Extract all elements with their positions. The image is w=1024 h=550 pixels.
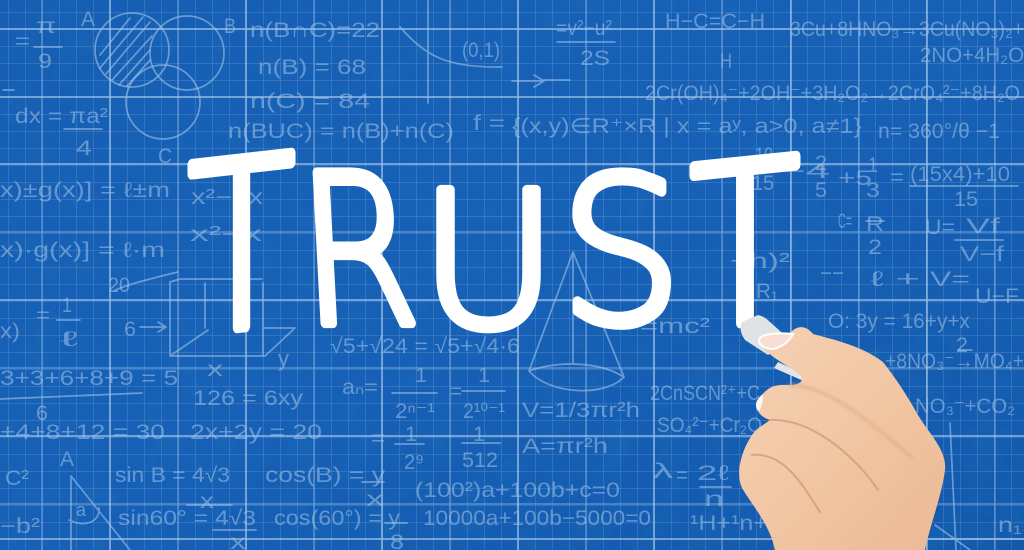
handwritten formulas left: 6	[36, 402, 48, 425]
handwritten formulas centre: =	[450, 380, 462, 403]
diagram: right triangle	[69, 476, 130, 550]
handwritten formulas left: x)	[0, 320, 20, 343]
handwritten formulas centre: 1	[478, 364, 490, 387]
handwritten formulas left: B	[224, 15, 236, 38]
handwritten formulas left: dx = πa²	[15, 105, 108, 128]
handwritten formulas right: V=	[930, 268, 970, 291]
handwritten formulas right: R	[866, 213, 884, 236]
handwritten formulas left: =	[36, 304, 50, 327]
handwritten formulas centre: =	[676, 464, 688, 487]
handwritten formulas left: +4+8+12 = 30	[0, 421, 165, 444]
hand holding chalk	[739, 327, 945, 550]
handwritten formulas centre: =	[371, 427, 385, 450]
handwritten formulas right: 15	[954, 188, 978, 211]
handwritten formulas right: H	[720, 50, 732, 73]
handwritten formulas centre: V=1/3πr²h	[522, 399, 640, 422]
handwritten formulas right: R₁	[756, 280, 778, 303]
handwritten formulas left: A	[60, 448, 74, 471]
handwritten formulas left: sin60° = 4√3	[118, 507, 256, 530]
graph: exponential curve	[400, 0, 502, 103]
diagram: cuboid	[115, 272, 295, 371]
handwritten formulas centre: (100²)a+100b+c=0	[415, 479, 620, 502]
handwritten formulas left: cos(60°) = y	[274, 507, 401, 530]
handwritten formulas left: n(C) = 84	[250, 90, 370, 113]
handwritten formulas centre: f =	[473, 112, 505, 135]
diagram: right triangle: a	[76, 500, 87, 520]
diagram: venn circles	[95, 13, 224, 139]
handwritten formulas centre: 2CnSCN²⁺+C	[650, 382, 760, 405]
handwritten formulas left: x²−x	[190, 223, 263, 246]
main word: TRUST: S	[560, 136, 682, 370]
handwritten formulas centre	[330, 17, 1020, 535]
handwritten formulas centre: {(x,y)∈R⁺×R | x = aʸ, a>0, a≠1}	[512, 115, 862, 138]
handwritten formulas centre: n= 360°/θ −1	[878, 120, 1000, 143]
handwritten formulas centre: ¹H+¹n+	[690, 512, 768, 535]
handwritten formulas right: −4	[780, 160, 831, 183]
handwritten formulas left: π	[36, 15, 56, 38]
handwritten formulas left: ℓ	[60, 328, 79, 351]
main word: TRUST: R	[294, 132, 423, 372]
handwritten formulas left: 3+3+6+8+9 = 5	[0, 367, 178, 390]
main word: TRUST: T	[690, 112, 800, 381]
handwritten formulas left: =	[15, 30, 30, 53]
handwritten formulas left: x	[366, 488, 385, 511]
diagram: cone	[529, 252, 624, 391]
handwritten formulas left: −b²	[0, 515, 40, 538]
handwritten formulas centre: 1	[415, 364, 427, 387]
handwritten formulas left: 126 = 6xy	[193, 387, 304, 410]
main word: TRUST: T	[188, 109, 295, 388]
handwritten formulas right: n₁	[998, 514, 1022, 537]
handwritten formulas centre: =v²−u²	[556, 17, 612, 40]
finger creases	[752, 385, 912, 512]
handwritten formulas right: =	[890, 166, 904, 189]
handwritten formulas right: +5	[838, 167, 872, 190]
handwritten formulas right: 3	[866, 179, 880, 202]
handwritten formulas right: 2	[868, 236, 882, 259]
main word: TRUST: U	[420, 153, 557, 371]
diagram: triangle bottom right	[925, 423, 1024, 550]
handwritten formulas right: ℓ +	[870, 268, 920, 291]
fingernail index	[759, 333, 793, 349]
handwritten formulas left: x	[207, 358, 224, 381]
handwritten formulas right: 2	[956, 334, 968, 357]
handwritten formulas right: 2	[815, 152, 827, 175]
diagram: cuboid: y	[278, 346, 289, 371]
handwritten formulas right: 2NO+4H₂O	[920, 44, 1024, 67]
handwritten formulas right: U−F	[975, 285, 1019, 308]
handwritten formulas left: A	[81, 8, 95, 31]
handwritten formulas right: V−f	[960, 243, 1004, 266]
handwritten formulas centre: 2ℓ	[697, 462, 729, 485]
handwritten formulas left: n(B) = 68	[258, 56, 366, 79]
handwritten formulas left: n(BUC) = n(B)+n(C)	[228, 120, 454, 143]
handwritten formulas right: −−	[820, 262, 844, 285]
handwritten formulas centre: 1	[473, 423, 485, 446]
handwritten formulas right: NO₃⁻+CO₂	[915, 395, 1015, 418]
handwritten formulas left: x²−4x	[191, 186, 264, 209]
handwritten formulas left: n(B∩C)=22	[250, 19, 380, 42]
second fingernail	[756, 394, 763, 411]
handwritten formulas left: C	[158, 145, 172, 168]
handwritten formulas left: x)·g(x)] = ℓ·m	[0, 239, 165, 262]
handwritten formulas left	[0, 8, 500, 550]
handwritten formulas centre: 10000a+100b−5000=0	[423, 507, 651, 530]
handwritten formulas centre: λ	[653, 460, 674, 483]
handwritten formulas right: (15x4)+10	[910, 163, 1010, 186]
handwritten formulas left: 6	[124, 318, 136, 341]
chalk	[741, 315, 812, 382]
handwritten formulas centre: aₙ=	[342, 376, 378, 399]
handwritten formulas right: U=	[925, 216, 955, 239]
handwritten formulas left: 1	[62, 294, 72, 317]
handwritten formulas centre: 2⁹	[404, 451, 424, 474]
handwritten formulas right: 10	[755, 144, 773, 167]
handwritten formulas left: x	[200, 490, 215, 513]
handwritten formulas left: 4	[76, 137, 92, 160]
handwritten formulas right: Vf	[966, 215, 1000, 238]
handwritten formulas centre: =mc²	[640, 315, 710, 338]
handwritten formulas left: 20	[108, 274, 130, 297]
handwritten formulas centre: 2ⁿ⁻¹	[395, 400, 435, 423]
handwritten formulas centre: 2¹⁰⁻¹	[463, 400, 505, 423]
handwritten formulas right: O: 3y = 16+y+x	[828, 310, 970, 333]
handwritten formulas left: cos(B) = y	[265, 464, 386, 487]
main word: TRUST	[188, 109, 800, 388]
handwritten formulas left: (0,1)	[462, 39, 500, 62]
handwritten formulas right	[665, 10, 1024, 537]
handwritten formulas right: 1	[868, 154, 878, 177]
handwritten formulas left: x)±g(x)] = ℓ±m	[0, 179, 170, 202]
handwritten formulas centre: A=πr²h	[522, 435, 608, 458]
handwritten formulas right: 15	[752, 172, 774, 195]
handwritten formulas left: 2x+2y = 20	[190, 421, 322, 444]
handwritten formulas right: +h)²	[730, 250, 790, 273]
handwritten formulas centre: 2S	[580, 47, 610, 70]
handwritten formulas centre: n	[704, 488, 724, 511]
handwritten formulas right: 5	[815, 179, 827, 202]
handwritten formulas centre: 512	[462, 449, 498, 472]
handwritten formulas centre: SO₄²⁻+Cr₂O	[657, 414, 762, 437]
handwritten formulas left: 9	[38, 50, 52, 73]
handwritten formulas left: C²	[5, 467, 29, 490]
handwritten formulas centre: √5+√24 = √5+√4·6	[330, 335, 520, 358]
handwritten formulas right: C=	[838, 210, 852, 233]
handwritten formulas centre: 1	[405, 423, 417, 446]
handwritten formulas left: sin B = 4√3	[115, 464, 230, 487]
handwritten formulas right: H−C=C−H	[665, 10, 765, 33]
